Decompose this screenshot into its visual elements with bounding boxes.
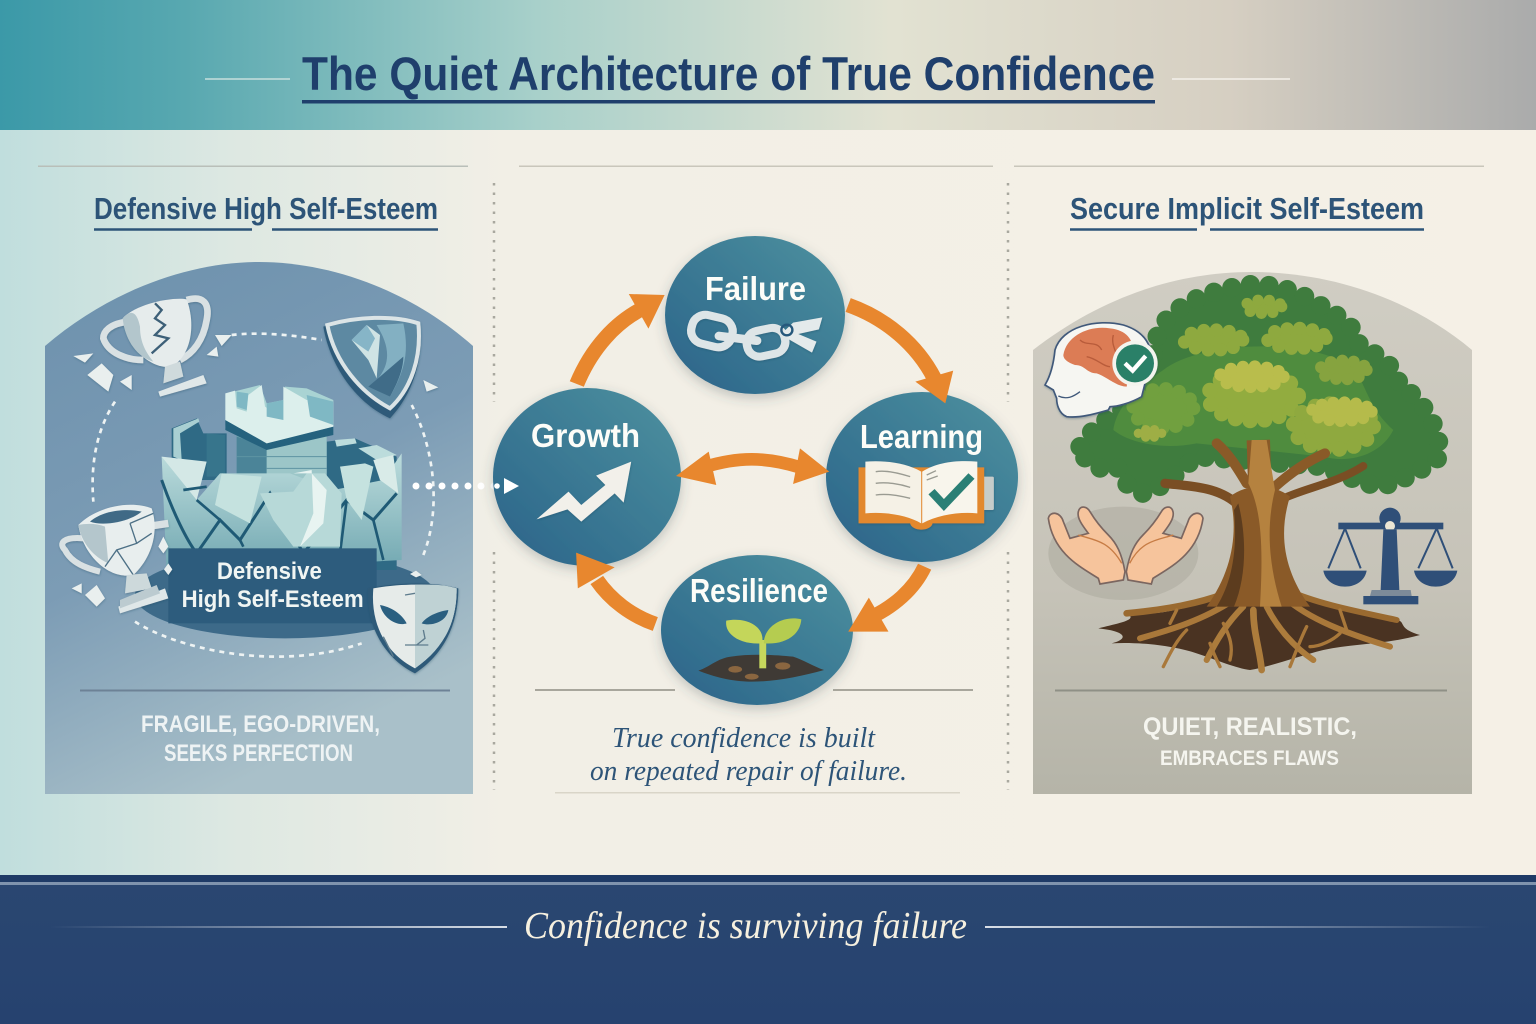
learning node: Learning (860, 418, 983, 455)
arrow: learning to resilience (848, 567, 925, 632)
icon: cracked trophy (73, 299, 438, 397)
banner (168, 548, 377, 623)
banner text: Defensive (217, 558, 322, 585)
dotted orbit (93, 334, 434, 657)
illustration: crumbling fortress with trophies (62, 299, 458, 673)
icon: broken chain (688, 312, 822, 359)
icon: connector arrowhead (494, 478, 519, 494)
arrow: resilience to growth (576, 553, 655, 624)
caption: true confidence: on repeated repair of failure. (590, 756, 907, 787)
panel: defensive high self-esteem (45, 191, 520, 794)
icon: sprout in soil (698, 618, 824, 682)
illustration: rooted tree (1045, 285, 1457, 670)
caption: fragile: FRAGILE, EGO-DRIVEN, (141, 711, 380, 738)
dotted connector arrow (416, 478, 520, 494)
divider (80, 690, 450, 692)
icon: open hands (1048, 507, 1203, 600)
heading: secure implicit self-esteem: Secure Implicit Self-Esteem (1070, 191, 1424, 226)
arrow: growth and learning double (676, 448, 829, 485)
growth node: Growth (531, 417, 640, 454)
caption: quiet: QUIET, REALISTIC, (1143, 713, 1357, 741)
divider (1055, 690, 1447, 692)
tree foliage (1080, 285, 1440, 493)
caption: quiet: EMBRACES FLAWS (1160, 747, 1339, 770)
icon: open book with check (859, 461, 994, 530)
header band (0, 0, 1536, 130)
icon: balance scale (1323, 508, 1457, 604)
arrow: failure to learning (848, 305, 953, 403)
cycle arrows (576, 294, 953, 632)
icon: cracked mask (368, 583, 458, 673)
caption: fragile: SEEKS PERFECTION (164, 740, 353, 767)
growth node (493, 388, 681, 566)
failure node (665, 236, 845, 394)
caption: quiet (1143, 713, 1357, 770)
banner text: High Self-Esteem (182, 586, 364, 613)
failure node: Failure (705, 270, 806, 307)
title: The Quiet Architecture of True Confidence (302, 47, 1155, 100)
footer band (0, 875, 1536, 1024)
icon: shield (323, 317, 421, 418)
caption: fragile (141, 711, 380, 767)
banner text (182, 558, 364, 613)
resilience node: Resilience (690, 572, 828, 609)
tree trunk and branches (1165, 440, 1363, 607)
footer tagline: Confidence is surviving failure (524, 905, 967, 947)
learning node (826, 392, 1018, 562)
caption: true confidence (590, 723, 907, 787)
caption: true confidence: True confidence is built (612, 723, 876, 754)
icon: shattered trophy (62, 505, 422, 613)
tree roots (1098, 590, 1420, 670)
fortress (162, 385, 402, 573)
arched panel background (45, 262, 473, 794)
panel: repair cycle (493, 236, 1018, 794)
arrow: growth to failure (577, 294, 665, 384)
icon: growth arrow (536, 462, 631, 522)
icon: head with brain and check (1045, 323, 1158, 417)
resilience node (661, 555, 853, 705)
platform shadow (135, 552, 435, 638)
arched panel background (1033, 272, 1472, 794)
heading: defensive high self-esteem: Defensive High Self-Esteem (94, 191, 438, 226)
page background (0, 130, 1536, 876)
panel: secure implicit self-esteem (1033, 191, 1472, 794)
